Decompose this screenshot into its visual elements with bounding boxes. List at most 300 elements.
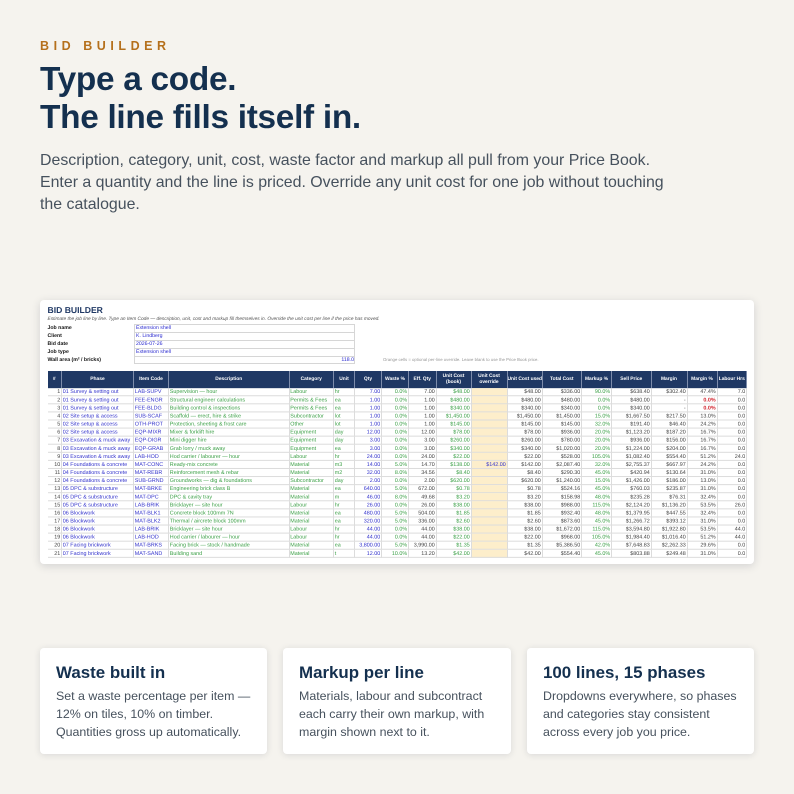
table rows: $1.85: [527, 511, 541, 517]
table rows: $620.00: [521, 478, 541, 485]
table rows: lot: [335, 422, 340, 428]
table rows: $46.40: [669, 422, 686, 428]
table rows: m2: [335, 470, 342, 476]
table rows: 1.00: [424, 406, 435, 412]
table rows: 32.4%: [700, 495, 716, 501]
table rows: $554.40: [561, 551, 580, 557]
table header: Total Cost: [550, 377, 574, 382]
table rows: $1,426.00: [626, 478, 650, 485]
table rows: 01 Survey & setting out: [63, 398, 119, 404]
table rows: $932.40: [561, 511, 580, 517]
table rows: 31.0%: [700, 470, 716, 476]
table rows: MAT-CONC: [135, 462, 163, 468]
table header: Phase: [90, 377, 105, 382]
table rows: 672.00: [418, 487, 435, 493]
table rows: ea: [335, 511, 341, 517]
table rows: $48.00: [453, 390, 470, 396]
table rows: 5: [57, 422, 60, 428]
table rows: 0.0: [738, 446, 745, 452]
table rows: 20.0%: [595, 430, 610, 436]
table rows: Grab lorry / muck away: [170, 446, 225, 452]
table rows: $1,450.00: [556, 414, 580, 420]
table rows: Bricklayer — site hour: [170, 527, 223, 533]
table rows: 06 Blockwork: [63, 511, 95, 517]
job details form: Job type: [48, 348, 69, 354]
table rows: 15: [54, 503, 60, 509]
table rows: DPC & cavity tray: [170, 495, 212, 501]
table rows: day: [335, 438, 344, 444]
table rows: 0.0: [738, 551, 745, 557]
intro paragraph: Description, category, unit, cost, waste factor and markup all pull from your Price Book.: [40, 152, 650, 169]
table rows: 14.00: [367, 462, 380, 468]
table rows: 16.7%: [700, 446, 716, 452]
table rows: $2.60: [456, 519, 470, 525]
table rows: 2.00: [424, 478, 435, 485]
title: [40, 61, 361, 136]
table rows: 04 Foundations & concrete: [63, 462, 127, 468]
table rows: 13.20: [421, 551, 435, 557]
job details form: K. Lindberg: [136, 332, 163, 338]
table rows: $3,594.80: [626, 527, 650, 533]
table rows: 10: [54, 462, 60, 468]
table rows: $191.40: [630, 422, 650, 428]
table rows: 3,990.00: [414, 543, 435, 549]
table rows: Equipment: [290, 446, 316, 452]
table rows: $145.00: [521, 422, 541, 428]
table rows: ea: [335, 406, 341, 412]
table rows: $2,262.33: [662, 543, 686, 549]
estimate table: [48, 371, 747, 558]
table rows: 45.0%: [595, 487, 610, 493]
table rows: 8: [57, 446, 60, 452]
table rows: Engineering brick class B: [170, 487, 230, 493]
table rows: $393.12: [666, 519, 686, 525]
card heading: Waste built in: [56, 663, 165, 682]
table rows: 45.0%: [595, 551, 610, 557]
card text: across every job you price.: [543, 725, 690, 739]
table rows: 0.0%: [703, 406, 716, 412]
table rows: [48, 388, 747, 558]
table rows: 46.00: [367, 495, 380, 501]
table rows: m3: [335, 462, 342, 468]
table header: Unit Cost used: [508, 377, 542, 382]
table rows: 51.2%: [700, 535, 716, 541]
job details form: Extension shell: [136, 324, 171, 330]
table rows: Bricklayer — site hour: [170, 503, 223, 509]
table rows: 640.00: [364, 487, 380, 493]
table rows: Labour: [290, 535, 307, 541]
table rows: ea: [335, 398, 341, 404]
table rows: 0.0: [738, 406, 745, 412]
table rows: 0.0%: [395, 390, 407, 396]
card text: margin shown next to it.: [299, 725, 430, 739]
card text: Set a waste percentage per item —: [56, 688, 250, 702]
table rows: $145.00: [450, 422, 470, 428]
table rows: $340.00: [521, 446, 541, 452]
table rows: $302.40: [666, 390, 686, 396]
table rows: $340.00: [450, 406, 470, 412]
table rows: 5.0%: [395, 511, 407, 517]
card text: Materials, labour and subcontract: [299, 688, 482, 702]
table rows: Equipment: [290, 430, 316, 436]
table rows: $1,984.40: [626, 535, 650, 541]
table rows: $290.30: [561, 470, 580, 476]
table rows: Material: [290, 487, 309, 493]
table rows: Subcontractor: [290, 414, 324, 420]
table rows: 04 Foundations & concrete: [63, 478, 127, 485]
table rows: 504.00: [418, 511, 435, 517]
table rows: 3: [57, 406, 60, 412]
table rows: 0.0%: [395, 478, 407, 485]
table rows: 44.0: [735, 535, 745, 541]
table rows: 0.0: [738, 470, 745, 476]
card text: [299, 688, 484, 739]
table rows: $480.00: [450, 398, 470, 404]
table rows: 48.0%: [595, 495, 610, 501]
table rows: ea: [335, 543, 341, 549]
table rows: LAB-SUPV: [135, 390, 161, 396]
table rows: EQP-GRAB: [135, 446, 163, 452]
panel: waste built in: [40, 648, 267, 754]
table rows: 12.00: [421, 430, 435, 436]
table rows: 7: [57, 438, 60, 444]
table rows: Concrete block 100mm 7N: [170, 511, 234, 517]
table rows: Material: [290, 511, 309, 517]
table rows: MAT-BLK2: [135, 519, 160, 525]
table rows: $1,266.72: [626, 519, 650, 525]
table rows: 13.0%: [700, 478, 716, 485]
card text: [56, 688, 250, 739]
table rows: $760.03: [630, 487, 650, 493]
table header: Waste %: [385, 377, 405, 382]
table rows: Reinforcement mesh & rebar: [170, 470, 239, 476]
table header: #: [53, 377, 56, 382]
table rows: 10.0%: [392, 551, 407, 557]
table rows: 4: [57, 414, 60, 420]
table rows: MAT-BRKS: [135, 543, 162, 549]
table rows: $0.78: [527, 487, 541, 493]
table rows: 32.0%: [595, 462, 610, 468]
table rows: $38.00: [453, 503, 470, 509]
table rows: 15.0%: [595, 478, 610, 485]
table rows: Material: [290, 470, 309, 476]
table rows: EQP-DIGR: [135, 438, 161, 444]
table rows: $1,082.40: [626, 454, 650, 460]
table rows: 90.0%: [595, 390, 610, 396]
table rows: $480.00: [630, 398, 650, 404]
table rows: 7.00: [424, 390, 435, 396]
table rows: 12: [54, 478, 60, 485]
table rows: $1,672.00: [556, 527, 580, 533]
table rows: 06 Blockwork: [63, 519, 95, 525]
table rows: 16.7%: [700, 438, 716, 444]
table header: Qty: [364, 377, 372, 382]
table rows: $1,016.40: [662, 535, 686, 541]
table rows: 34.56: [421, 470, 435, 476]
table rows: 105.0%: [592, 535, 610, 541]
table rows: $142.00: [486, 462, 506, 468]
table rows: 06 Blockwork: [63, 527, 95, 533]
table rows: $1.35: [456, 543, 470, 549]
table rows: $204.00: [666, 446, 686, 452]
table rows: m: [335, 495, 339, 501]
table rows: EQP-MIXR: [135, 430, 161, 436]
table rows: 19: [54, 535, 60, 541]
table rows: $48.00: [524, 390, 541, 396]
card text: each carry their own markup, with: [299, 707, 484, 721]
table rows: 0.0%: [395, 454, 407, 460]
table rows: 29.6%: [700, 543, 716, 549]
table rows: $235.87: [666, 487, 686, 493]
table rows: 26.00: [421, 503, 435, 509]
table rows: $340.00: [450, 446, 470, 452]
table rows: 53.5%: [700, 503, 716, 509]
table rows: 5.0%: [395, 487, 407, 493]
table rows: 0.0%: [598, 398, 610, 404]
table rows: MAT-DPC: [135, 495, 159, 501]
table rows: 3.00: [370, 438, 380, 444]
table rows: 31.0%: [700, 487, 716, 493]
table rows: 0.0%: [395, 398, 407, 404]
table rows: 3.00: [424, 446, 435, 452]
table rows: $420.94: [630, 470, 650, 476]
table rows: LAB-HOD: [135, 454, 159, 460]
table rows: 02 Site setup & access: [63, 422, 118, 428]
table rows: 0.0%: [395, 503, 407, 509]
table rows: $249.48: [666, 551, 686, 557]
table rows: FEE-ENGR: [135, 398, 163, 404]
table rows: ea: [335, 487, 341, 493]
table rows: $1.35: [527, 543, 541, 549]
table header: Labour Hrs: [719, 377, 745, 382]
table rows: 24.2%: [700, 462, 716, 468]
table rows: Labour: [290, 454, 307, 460]
table rows: hr: [335, 503, 340, 509]
table rows: 03 Excavation & muck away: [63, 454, 130, 460]
table rows: Scaffold — erect, hire & strike: [170, 414, 241, 420]
table rows: $1,450.00: [517, 414, 541, 420]
table rows: $8.40: [527, 470, 541, 476]
table rows: 115.0%: [592, 503, 610, 509]
table header: Unit Cost (book): [443, 374, 464, 385]
table rows: 47.4%: [700, 390, 716, 396]
table rows: 48.0%: [595, 511, 610, 517]
card text: Quantities gross up automatically.: [56, 725, 241, 739]
table rows: $1,379.95: [626, 511, 650, 517]
table rows: 0.0: [738, 519, 745, 525]
table rows: 24.00: [367, 454, 380, 460]
intro paragraph: the catalogue.: [40, 196, 140, 213]
table rows: $8.40: [456, 470, 470, 476]
table rows: Hod carrier / labourer — hour: [170, 535, 240, 541]
override note: Orange cells = optional per-line override. Leave blank to use the Price Book price.: [383, 357, 539, 362]
card text: [543, 688, 737, 739]
table rows: -: [684, 398, 686, 404]
table rows: 0.0: [738, 462, 745, 468]
table rows: 8.0%: [395, 470, 407, 476]
table rows: $340.00: [630, 406, 650, 412]
table rows: $1,136.20: [662, 503, 686, 509]
panel: 100 lines, 15 phases: [527, 648, 754, 754]
job details form: Bid date: [48, 340, 68, 346]
table rows: Labour: [290, 503, 307, 509]
table rows: $3.20: [456, 495, 470, 501]
table rows: 0.0%: [598, 406, 610, 412]
table rows: 0.0%: [395, 446, 407, 452]
table rows: LAB-BRIK: [135, 527, 159, 533]
table rows: 31.0%: [700, 519, 716, 525]
panel: markup per line: [283, 648, 511, 754]
job details form: Extension shell: [136, 348, 171, 354]
table rows: 51.2%: [700, 454, 716, 460]
table rows: $1,240.00: [556, 478, 580, 485]
table rows: Supervision — hour: [170, 390, 217, 396]
table rows: $0.78: [456, 487, 470, 493]
table rows: $480.00: [521, 398, 541, 404]
table rows: hr: [335, 535, 340, 541]
table rows: $38.00: [453, 527, 470, 533]
table rows: $480.00: [561, 398, 580, 404]
table rows: $38.00: [524, 503, 541, 509]
table rows: 16: [54, 511, 60, 517]
table rows: day: [335, 430, 344, 436]
table rows: 03 Excavation & muck away: [63, 438, 130, 444]
card text: 12% on tiles, 10% on timber.: [56, 707, 213, 721]
job details form: Client: [48, 332, 62, 338]
intro paragraph: [40, 152, 664, 213]
table rows: 115.0%: [592, 527, 610, 533]
card text: and categories stay consistent: [543, 707, 710, 721]
table rows: day: [335, 478, 344, 485]
table rows: 44.00: [421, 535, 435, 541]
table rows: 0.0: [738, 438, 745, 444]
table rows: 18: [54, 527, 60, 533]
table rows: 44.0: [735, 527, 745, 533]
table rows: 105.0%: [592, 454, 610, 460]
table rows: 14.70: [421, 462, 435, 468]
table rows: 44.00: [367, 527, 380, 533]
table rows: 0.0: [738, 495, 745, 501]
sheet title: BID BUILDER: [48, 304, 103, 314]
table rows: 05 DPC & substructure: [63, 495, 118, 501]
table rows: $667.97: [666, 462, 686, 468]
table rows: 7.00: [370, 390, 380, 396]
table rows: hr: [335, 390, 340, 396]
table rows: Equipment: [290, 438, 316, 444]
table rows: 49.68: [421, 495, 435, 501]
table rows: 2.00: [370, 478, 380, 485]
table header: Unit: [339, 377, 349, 382]
table rows: Material: [290, 519, 309, 525]
table rows: $260.00: [521, 438, 541, 444]
table rows: $7,648.83: [626, 543, 650, 549]
table rows: 42.0%: [595, 543, 610, 549]
table rows: 45.0%: [595, 470, 610, 476]
table rows: Permits & Fees: [290, 406, 327, 412]
card text: Dropdowns everywhere, so phases: [543, 688, 737, 702]
table rows: 3.00: [370, 446, 380, 452]
table rows: 6: [57, 430, 60, 436]
table rows: $340.00: [561, 406, 580, 412]
table rows: 0.0%: [395, 422, 407, 428]
table rows: $803.88: [630, 551, 650, 557]
table rows: $528.00: [561, 454, 580, 460]
table rows: 14: [54, 495, 60, 501]
table rows: 0.0%: [395, 535, 407, 541]
card heading: 100 lines, 15 phases: [543, 663, 705, 682]
table rows: LAB-BRIK: [135, 503, 159, 509]
table rows: $1,224.00: [626, 446, 650, 452]
table rows: 07 Facing brickwork: [63, 551, 111, 557]
table rows: $130.64: [666, 470, 686, 476]
table rows: $5,386.50: [556, 543, 580, 549]
table rows: $78.00: [453, 430, 470, 436]
table rows: $138.00: [450, 462, 470, 468]
job details form: 2026-07-26: [136, 340, 163, 346]
table rows: $78.00: [524, 430, 541, 436]
table header: Item Code: [139, 377, 163, 382]
table header: Category: [301, 377, 322, 382]
table rows: $620.00: [450, 478, 470, 485]
table rows: $1,667.50: [626, 414, 650, 420]
table rows: Building sand: [170, 551, 202, 557]
table rows: 0.0: [738, 543, 745, 549]
table rows: $156.00: [666, 438, 686, 444]
table rows: 5.0%: [395, 519, 407, 525]
table rows: 16.7%: [700, 430, 716, 436]
table rows: Building control & inspections: [170, 406, 240, 412]
table rows: Hod carrier / labourer — hour: [170, 454, 240, 460]
table rows: 0.0: [738, 414, 745, 420]
table rows: 12.00: [367, 430, 380, 436]
table rows: LAB-HOD: [135, 535, 159, 541]
table rows: $780.00: [561, 438, 580, 444]
table rows: 44.00: [421, 527, 435, 533]
table rows: 3,800.00: [359, 543, 380, 549]
table header: Sell Price: [620, 377, 642, 382]
table rows: 07 Facing brickwork: [63, 543, 111, 549]
table rows: 24.2%: [700, 422, 716, 428]
table rows: $873.60: [561, 519, 580, 525]
table rows: 03 Excavation & muck away: [63, 446, 130, 452]
table rows: SUB-SCAF: [135, 414, 162, 420]
table rows: $1,020.00: [556, 446, 580, 452]
table rows: 1.00: [424, 398, 435, 404]
table rows: 0.0%: [395, 414, 407, 420]
table rows: $217.50: [666, 414, 686, 420]
table rows: 0.0: [738, 478, 745, 485]
intro paragraph: Enter a quantity and the line is priced. Override any unit cost for one job without touching: [40, 174, 664, 191]
table rows: OTH-PROT: [135, 422, 163, 428]
table rows: 32.00: [367, 470, 380, 476]
title: Type a code.: [40, 61, 236, 98]
table rows: $260.00: [450, 438, 470, 444]
table rows: Groundworks — dig & foundations: [170, 478, 252, 485]
table rows: Material: [290, 543, 309, 549]
table rows: $42.00: [524, 551, 541, 557]
table rows: $2.60: [527, 519, 541, 525]
table rows: 13: [54, 487, 60, 493]
table rows: 05 DPC & substructure: [63, 487, 118, 493]
table rows: 5.0%: [395, 462, 407, 468]
table rows: 45.0%: [595, 519, 610, 525]
table rows: 24.00: [421, 454, 435, 460]
table rows: $22.00: [453, 535, 470, 541]
table rows: $554.40: [666, 454, 686, 460]
table rows: 480.00: [364, 511, 380, 517]
table rows: $340.00: [521, 406, 541, 412]
table rows: $524.16: [561, 487, 580, 493]
